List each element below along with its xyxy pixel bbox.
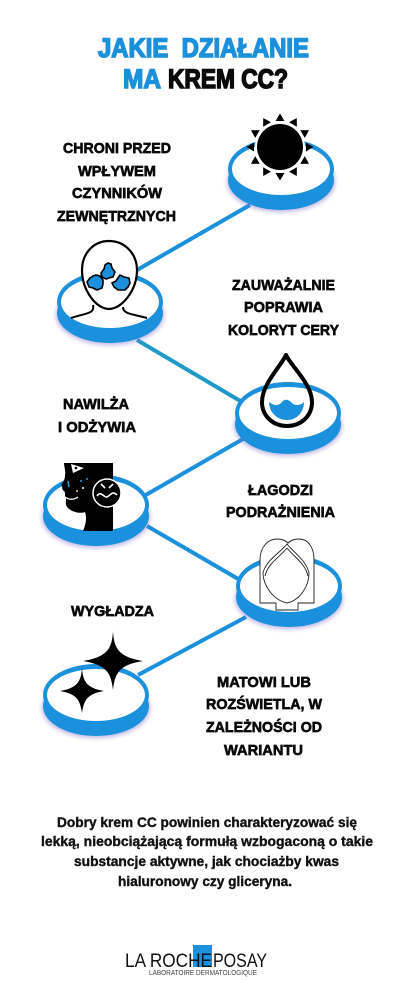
label: łagodzi: ŁAGODZI	[248, 482, 313, 499]
label: chroni przed: WPŁYWEM	[78, 163, 156, 180]
logo: LA ROCHE	[125, 951, 212, 972]
label: nawilża: I ODŻYWIA	[58, 419, 136, 436]
icon: water drop	[262, 355, 312, 426]
title: JAKIE DZIAŁANIE	[98, 33, 309, 63]
body text	[41, 814, 373, 889]
logo: LABORATOIRE DERMATOLOGIQUE	[149, 968, 257, 977]
label: matowi: ROZŚWIETLA, W	[206, 695, 323, 713]
body text: substancje aktywne, jak chociażby kwas	[74, 853, 339, 869]
icon: woman face outline	[260, 539, 314, 610]
label: chroni przed	[57, 140, 176, 225]
label: chroni przed: ZEWNĘTRZNYCH	[57, 208, 176, 225]
disc 3	[234, 382, 342, 456]
icon: sparkles	[60, 631, 143, 713]
title	[98, 33, 309, 94]
body text: lekką, nieobciążającą formułą wzbogaconą o takie	[41, 833, 373, 849]
label: łagodzi	[226, 482, 335, 521]
icon: face with blemishes	[71, 241, 147, 318]
body text: Dobry krem CC powinien charakteryzować się	[57, 814, 357, 830]
icon: acne profile	[61, 463, 121, 531]
label: matowi: WARIANTU	[224, 742, 303, 759]
label: chroni przed: CHRONI PRZED	[63, 140, 171, 157]
label: zauważalnie	[228, 277, 339, 339]
body text: hialuronowy czy gliceryna.	[118, 873, 292, 889]
icon: sun	[246, 114, 314, 180]
label: zauważalnie: POPRAWIA	[244, 299, 323, 316]
logo	[125, 945, 267, 977]
label: zauważalnie: ZAUWAŻALNIE	[232, 277, 335, 294]
label: matowi: ZALEŻNOŚCI OD	[206, 718, 322, 736]
label: matowi	[206, 674, 323, 759]
label: łagodzi: PODRAŻNIENIA	[226, 504, 335, 521]
logo: POSAY	[213, 951, 267, 972]
disc 6	[42, 664, 150, 738]
label: matowi: MATOWI LUB	[217, 674, 311, 691]
disc 2	[56, 271, 164, 345]
label: wygładza: WYGŁADZA	[71, 603, 154, 620]
disc 1	[227, 138, 335, 212]
title: MA	[123, 64, 161, 94]
connector lines	[137, 205, 250, 675]
label: nawilża: NAWILŻA	[63, 396, 129, 413]
label: zauważalnie: KOLORYT CERY	[228, 322, 339, 339]
label: chroni przed: CZYNNIKÓW	[72, 184, 163, 202]
disc 4	[42, 474, 150, 548]
disc 5	[235, 555, 343, 629]
title: KREM CC?	[168, 64, 288, 94]
label: nawilża	[58, 396, 136, 436]
